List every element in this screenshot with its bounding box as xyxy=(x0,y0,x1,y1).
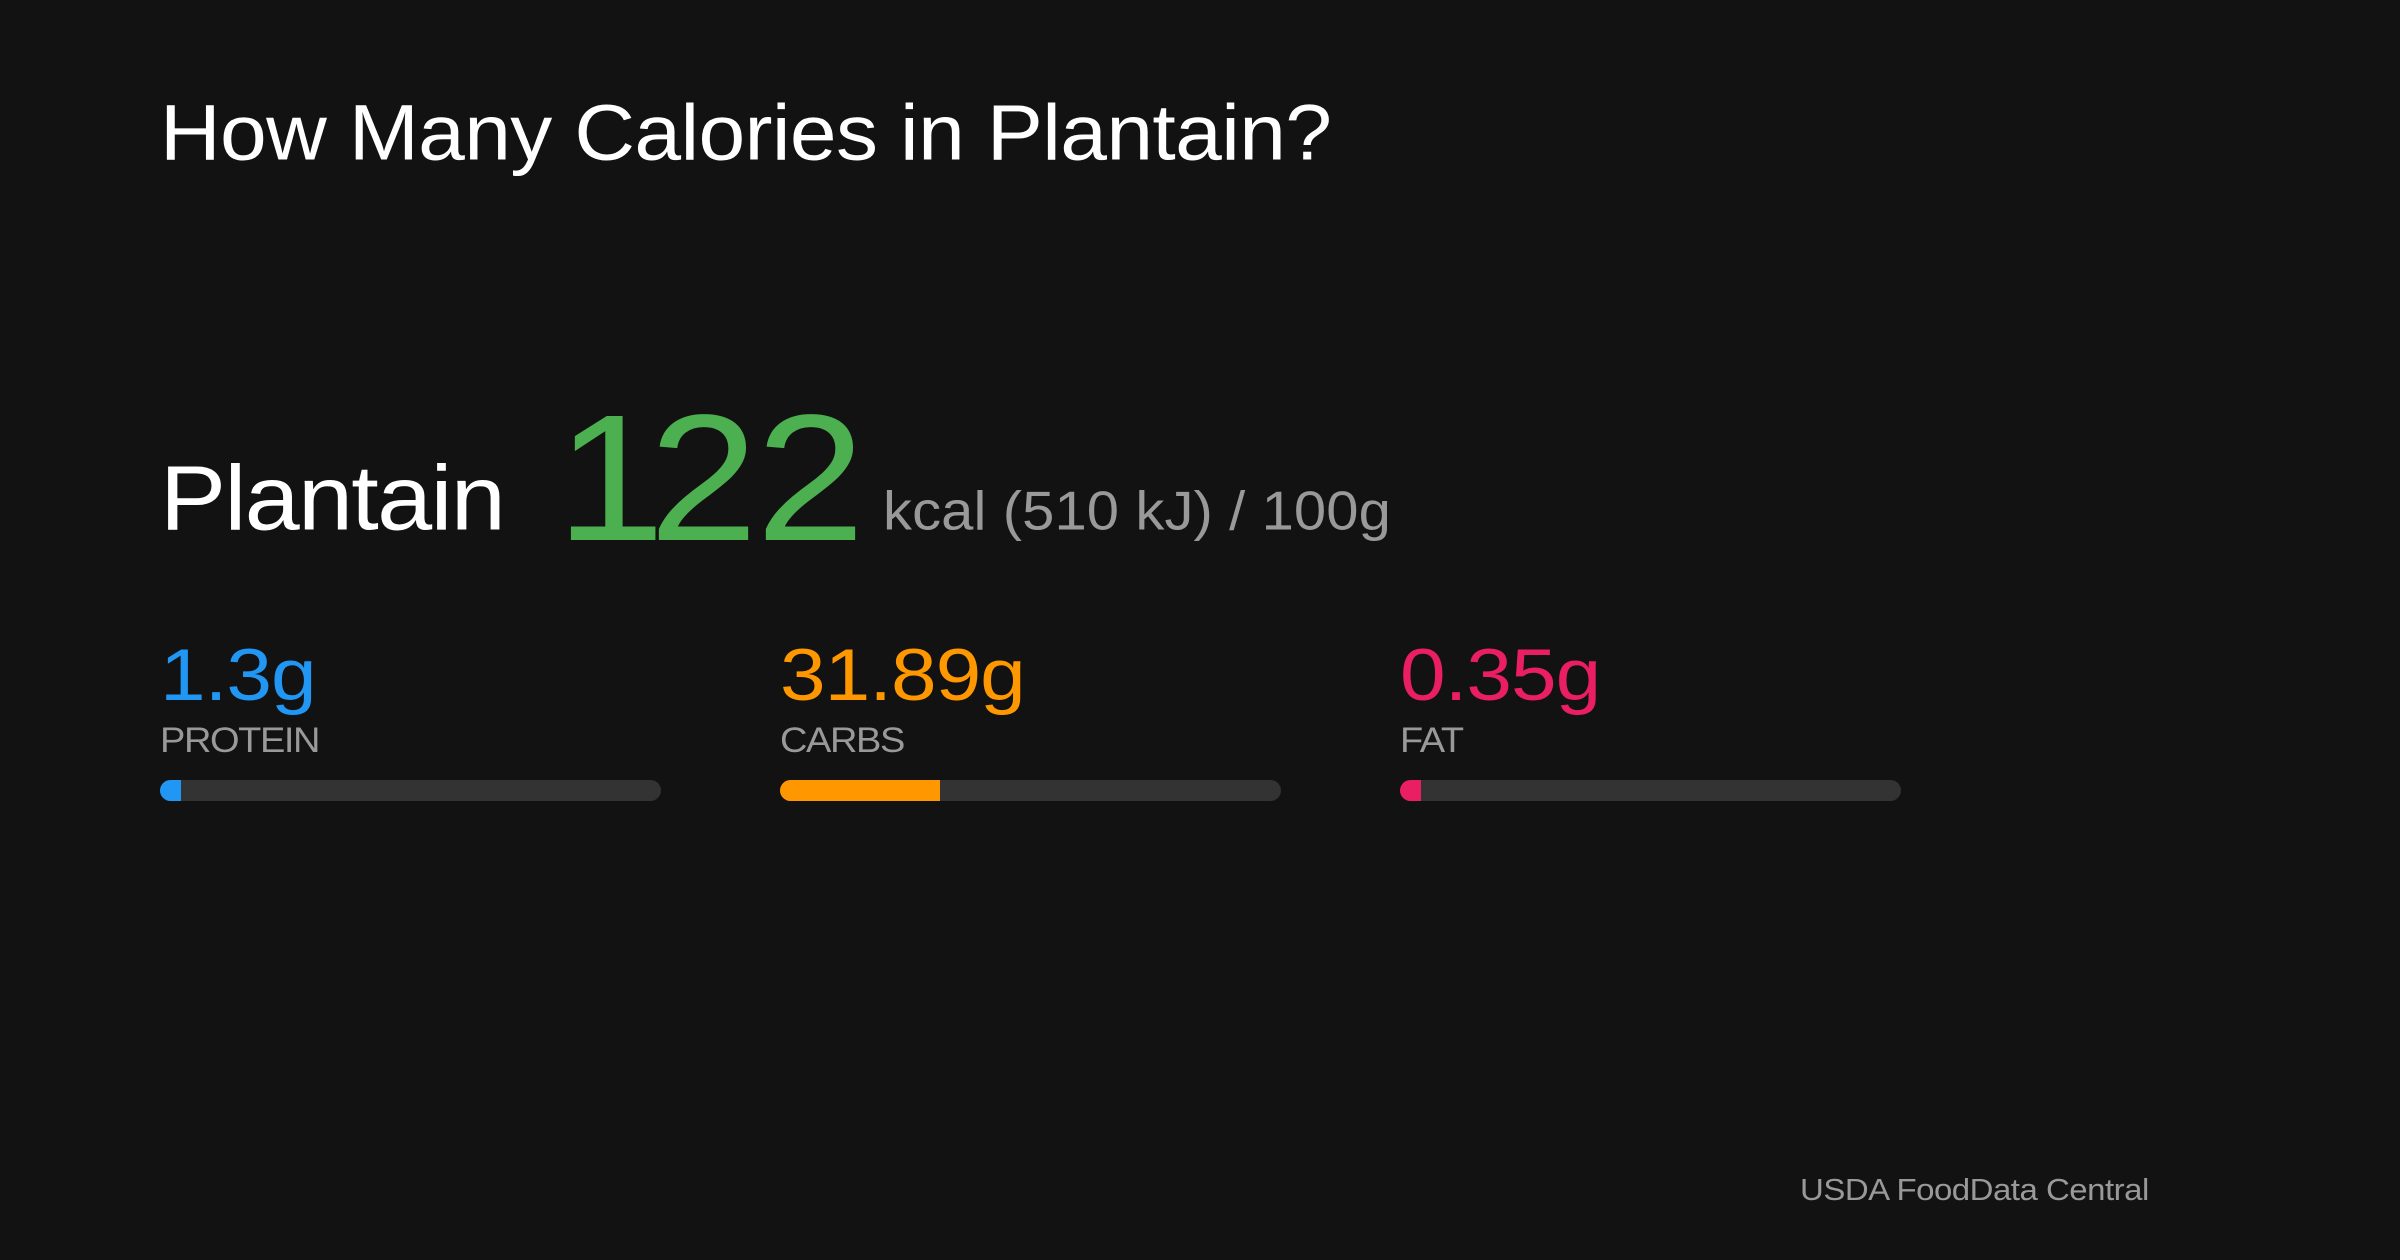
fat label: FAT xyxy=(1400,720,1464,760)
calorie unit: kcal (510 kJ) / 100g xyxy=(883,480,1391,541)
panel: calorie summary xyxy=(160,377,1391,578)
carbs bar xyxy=(780,780,1281,801)
calorie value: 122 xyxy=(556,377,865,578)
panel: fat xyxy=(1400,635,1901,801)
title: How Many Calories in Plantain? xyxy=(160,89,1331,177)
protein value: 1.3g xyxy=(160,635,316,716)
panel: protein xyxy=(160,635,661,801)
carbs label: CARBS xyxy=(780,720,904,760)
protein label: PROTEIN xyxy=(160,720,319,760)
fat value: 0.35g xyxy=(1400,635,1600,716)
panel: carbs xyxy=(780,635,1281,801)
source: USDA FoodData Central xyxy=(1800,1172,2149,1207)
carbs value: 31.89g xyxy=(780,635,1025,716)
food name: Plantain xyxy=(160,447,504,550)
fat bar xyxy=(1400,780,1901,801)
protein bar xyxy=(160,780,661,801)
